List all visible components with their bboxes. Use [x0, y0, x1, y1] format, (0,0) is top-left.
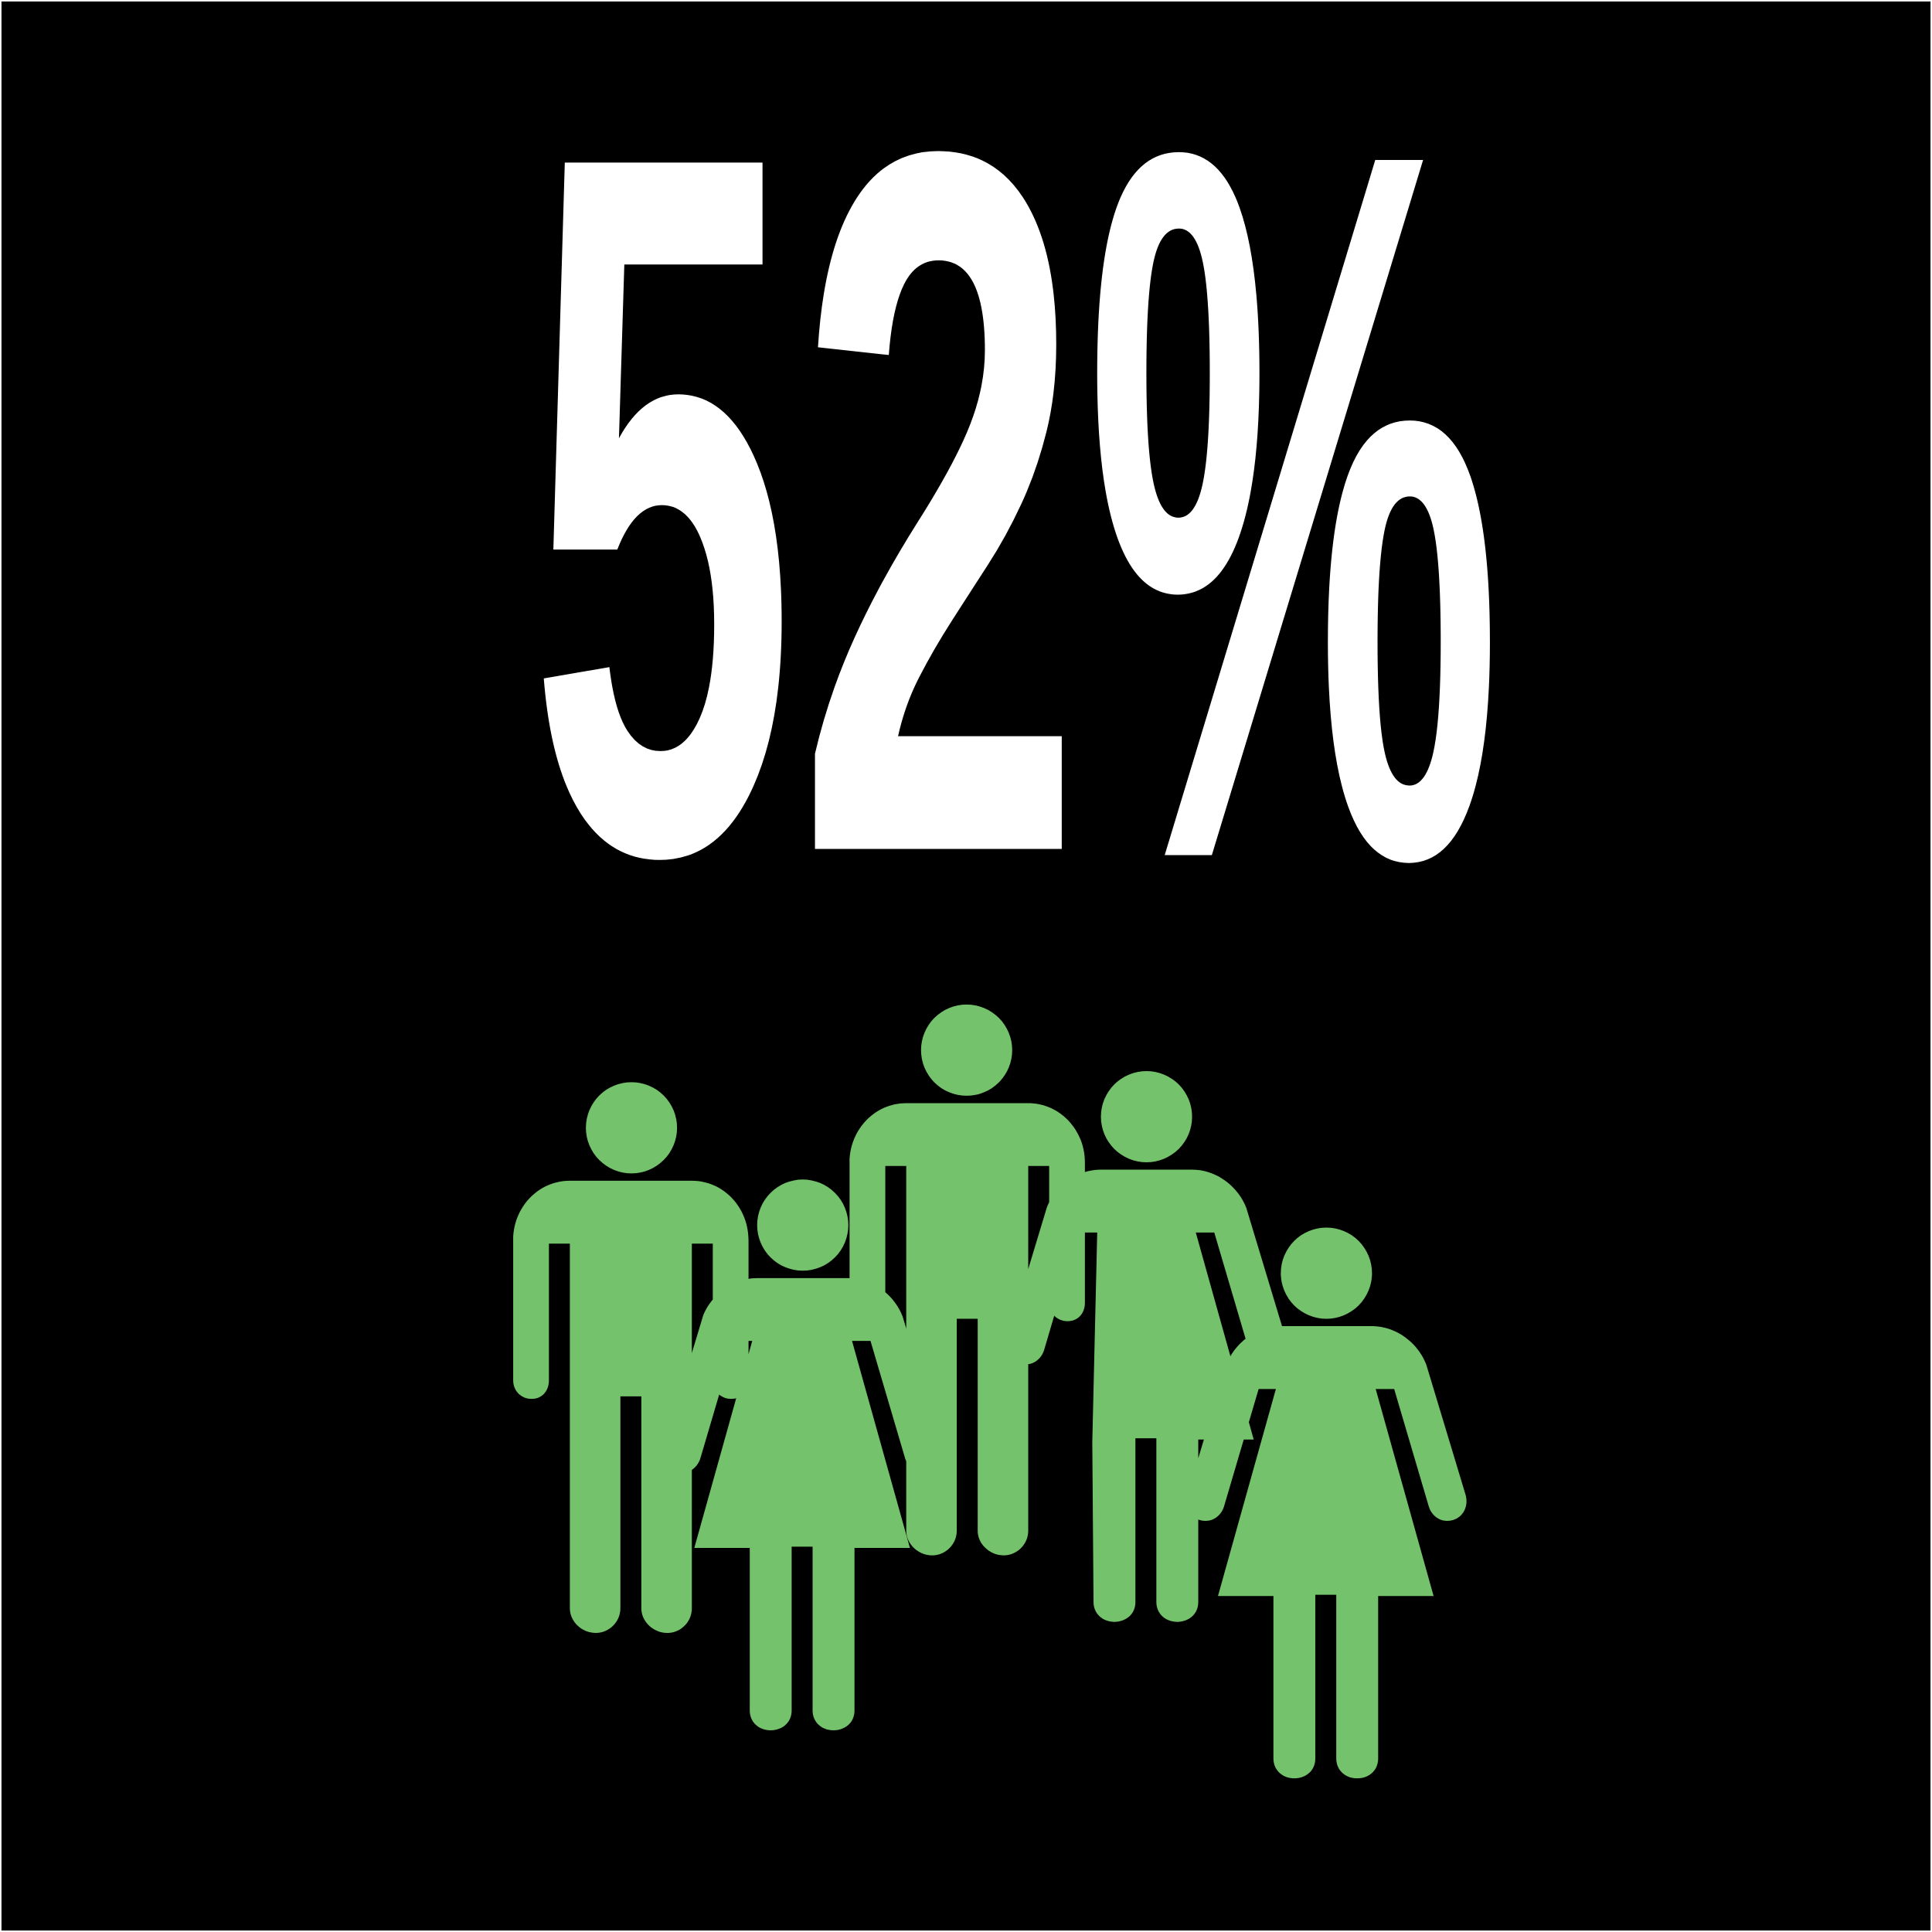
icon: left man	[513, 1082, 749, 1633]
icon: front right woman	[1186, 1227, 1467, 1778]
icon: centre man	[849, 1005, 1085, 1556]
icon: front left woman	[662, 1179, 943, 1730]
icon: rear right woman	[1006, 1071, 1287, 1622]
icon: group of five people	[513, 1005, 1467, 1778]
title: 52% statistic	[529, 0, 1502, 1070]
